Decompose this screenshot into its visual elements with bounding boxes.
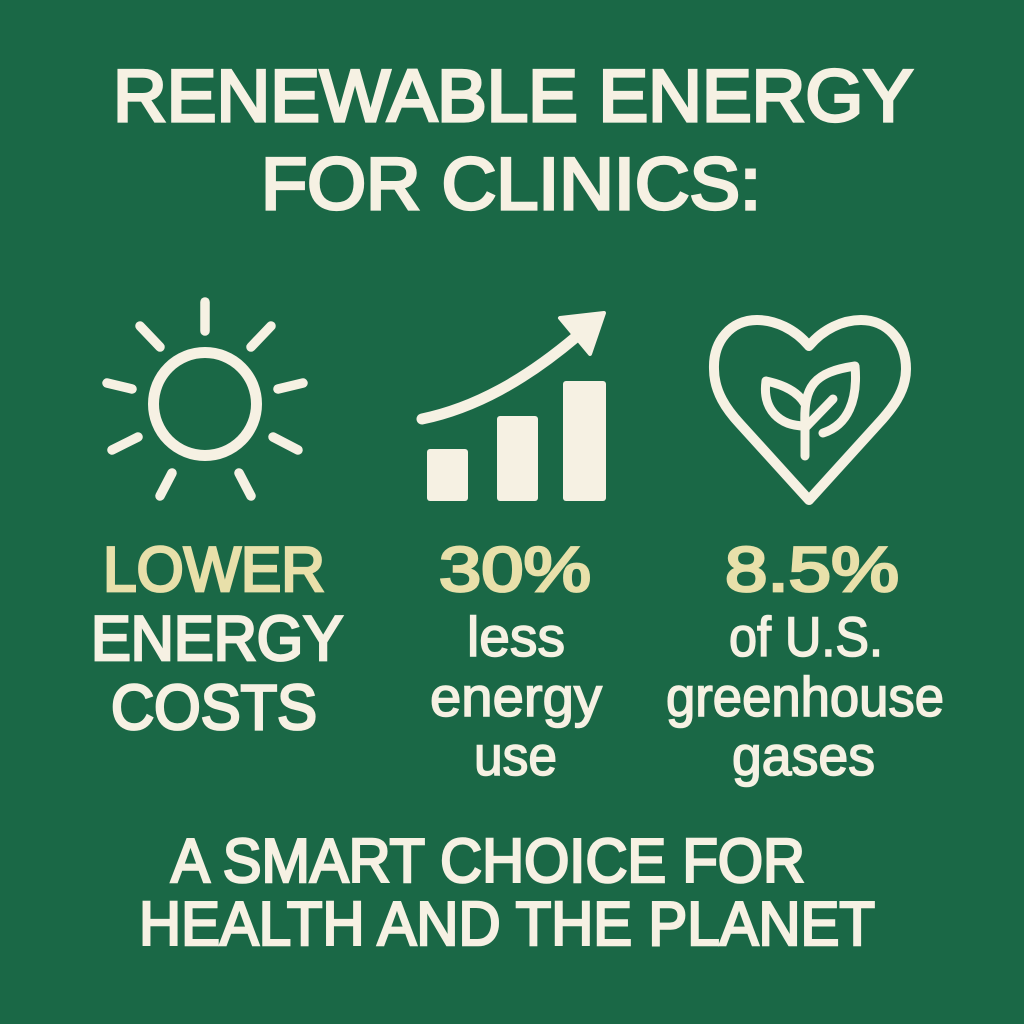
description: of U.S. greenhouse gases: of U.S. <box>729 605 883 668</box>
panel: 30% less energy use <box>422 313 606 787</box>
icon: rising bar chart with arrow <box>422 313 606 501</box>
title: FOR CLINICS: <box>261 144 761 225</box>
icon: sun <box>107 302 303 496</box>
panel: lower energy costs <box>91 302 343 743</box>
stat: 8.5%: 8.5% <box>725 535 899 605</box>
description: of U.S. greenhouse gases: greenhouse <box>666 665 944 728</box>
description: of U.S. greenhouse gases <box>666 605 944 787</box>
stat: 30%: 30% <box>439 535 591 605</box>
heading: lower energy costs <box>91 535 343 743</box>
description: less energy use: energy <box>430 665 602 728</box>
title <box>113 56 913 225</box>
description: less energy use: less <box>467 605 565 668</box>
description: of U.S. greenhouse gases: gases <box>732 724 875 787</box>
title: RENEWABLE ENERGY <box>113 56 913 137</box>
closing statement: HEALTH AND THE PLANET <box>139 890 875 959</box>
description: less energy use: use <box>474 724 557 787</box>
heading: lower energy costs: LOWER <box>103 535 325 605</box>
description: less energy use <box>430 605 602 787</box>
closing statement <box>139 827 875 959</box>
panel: 8.5% of U.S. greenhouse gases <box>666 320 944 787</box>
heading: lower energy costs: COSTS <box>111 673 317 743</box>
closing statement: A SMART CHOICE FOR <box>171 827 805 896</box>
heading: lower energy costs: ENERGY <box>91 604 343 674</box>
icon: heart with leaves <box>714 320 906 500</box>
